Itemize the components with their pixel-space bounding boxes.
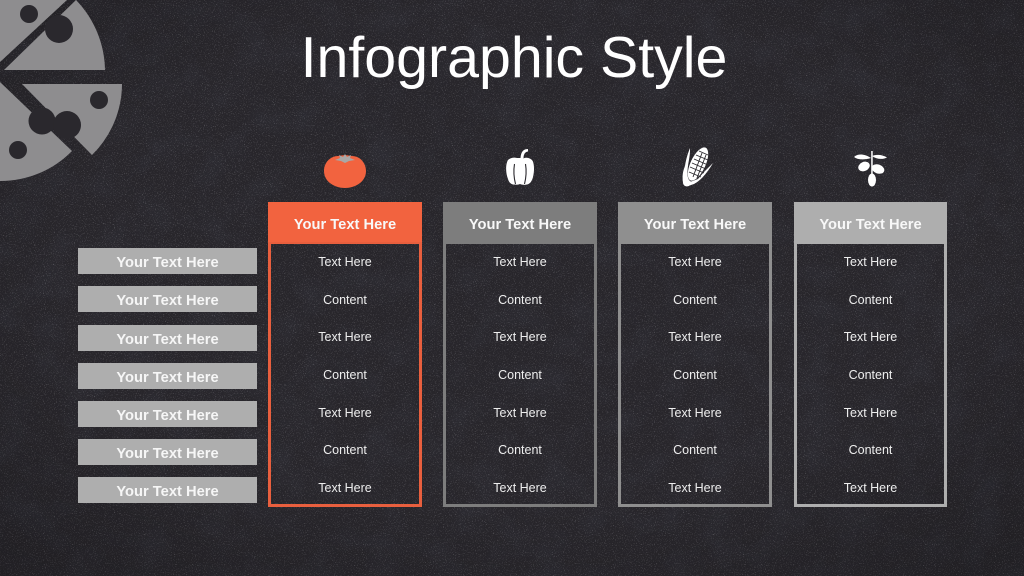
column 4 content: Text Here <box>844 330 897 344</box>
column 2 content: Text Here <box>493 481 547 495</box>
column 4 heading <box>794 202 947 242</box>
column 4 content: Content <box>849 368 892 382</box>
pizza toppings <box>9 5 108 159</box>
column 2 content: Content <box>498 368 542 382</box>
row label 2 <box>78 286 257 312</box>
row label 7 <box>78 477 257 503</box>
column 2 content: Content <box>498 293 542 307</box>
column 3 heading: Your Text Here <box>644 217 746 233</box>
column 3 content <box>618 242 772 507</box>
column 2 heading: Your Text Here <box>469 217 571 233</box>
icon: tomato <box>324 154 366 188</box>
column 1 content: Content <box>323 443 367 457</box>
title: Infographic Style <box>301 26 727 90</box>
row label 3: Your Text Here <box>116 332 219 348</box>
column 1 content: Text Here <box>318 481 372 495</box>
column 3 heading <box>618 202 772 242</box>
panel: column 4 <box>794 202 947 507</box>
row label 1 <box>78 248 257 274</box>
column 1 content: Text Here <box>318 255 372 269</box>
column 3 content: Content <box>673 293 717 307</box>
row label 3 <box>78 324 257 350</box>
column 1 content: Content <box>323 293 367 307</box>
column 1 content <box>268 242 422 507</box>
row label 6 <box>78 439 257 465</box>
row label 5: Your Text Here <box>116 408 219 424</box>
column 4 content: Text Here <box>844 255 897 269</box>
column 3 content: Content <box>673 443 717 457</box>
icon: corn <box>682 147 713 186</box>
row label 2: Your Text Here <box>116 293 219 309</box>
column 1 content: Text Here <box>318 406 372 420</box>
column 1 content: Content <box>323 368 367 382</box>
row label 1: Your Text Here <box>116 255 219 271</box>
panel: column 2 <box>443 202 597 507</box>
panel: column 1 <box>268 202 422 507</box>
row label 4: Your Text Here <box>116 370 219 386</box>
row label 5 <box>78 400 257 426</box>
column 3 content: Text Here <box>668 481 722 495</box>
column 1 heading <box>268 202 422 242</box>
column 2 content: Text Here <box>493 330 547 344</box>
column 4 content: Content <box>849 293 892 307</box>
column 4 content: Text Here <box>844 481 897 495</box>
panel: column 3 <box>618 202 772 507</box>
column 2 content: Content <box>498 443 542 457</box>
row label 7: Your Text Here <box>116 484 219 500</box>
pizza slice: top left <box>0 0 67 62</box>
column 4 content: Content <box>849 443 892 457</box>
column 2 content: Text Here <box>493 406 547 420</box>
column 3 content: Text Here <box>668 255 722 269</box>
column 3 content: Content <box>673 368 717 382</box>
pizza slice: top right <box>4 0 105 70</box>
row label 6: Your Text Here <box>116 446 219 462</box>
pizza slice: lower left <box>0 82 72 181</box>
column 2 content: Text Here <box>493 255 547 269</box>
column 2 heading <box>443 202 597 242</box>
column 2 content <box>443 242 597 507</box>
column 4 content: Text Here <box>844 406 897 420</box>
column 1 heading: Your Text Here <box>294 217 396 233</box>
pizza slice: lower right <box>22 84 122 155</box>
column 4 heading: Your Text Here <box>819 217 922 233</box>
column 3 content: Text Here <box>668 406 722 420</box>
column 4 content <box>794 242 947 507</box>
icon: pizza slices <box>0 0 122 181</box>
icon: olive branch <box>854 151 887 186</box>
column 3 content: Text Here <box>668 330 722 344</box>
column 1 content: Text Here <box>318 330 372 344</box>
row label 4 <box>78 362 257 388</box>
icon: bell pepper <box>506 149 534 185</box>
